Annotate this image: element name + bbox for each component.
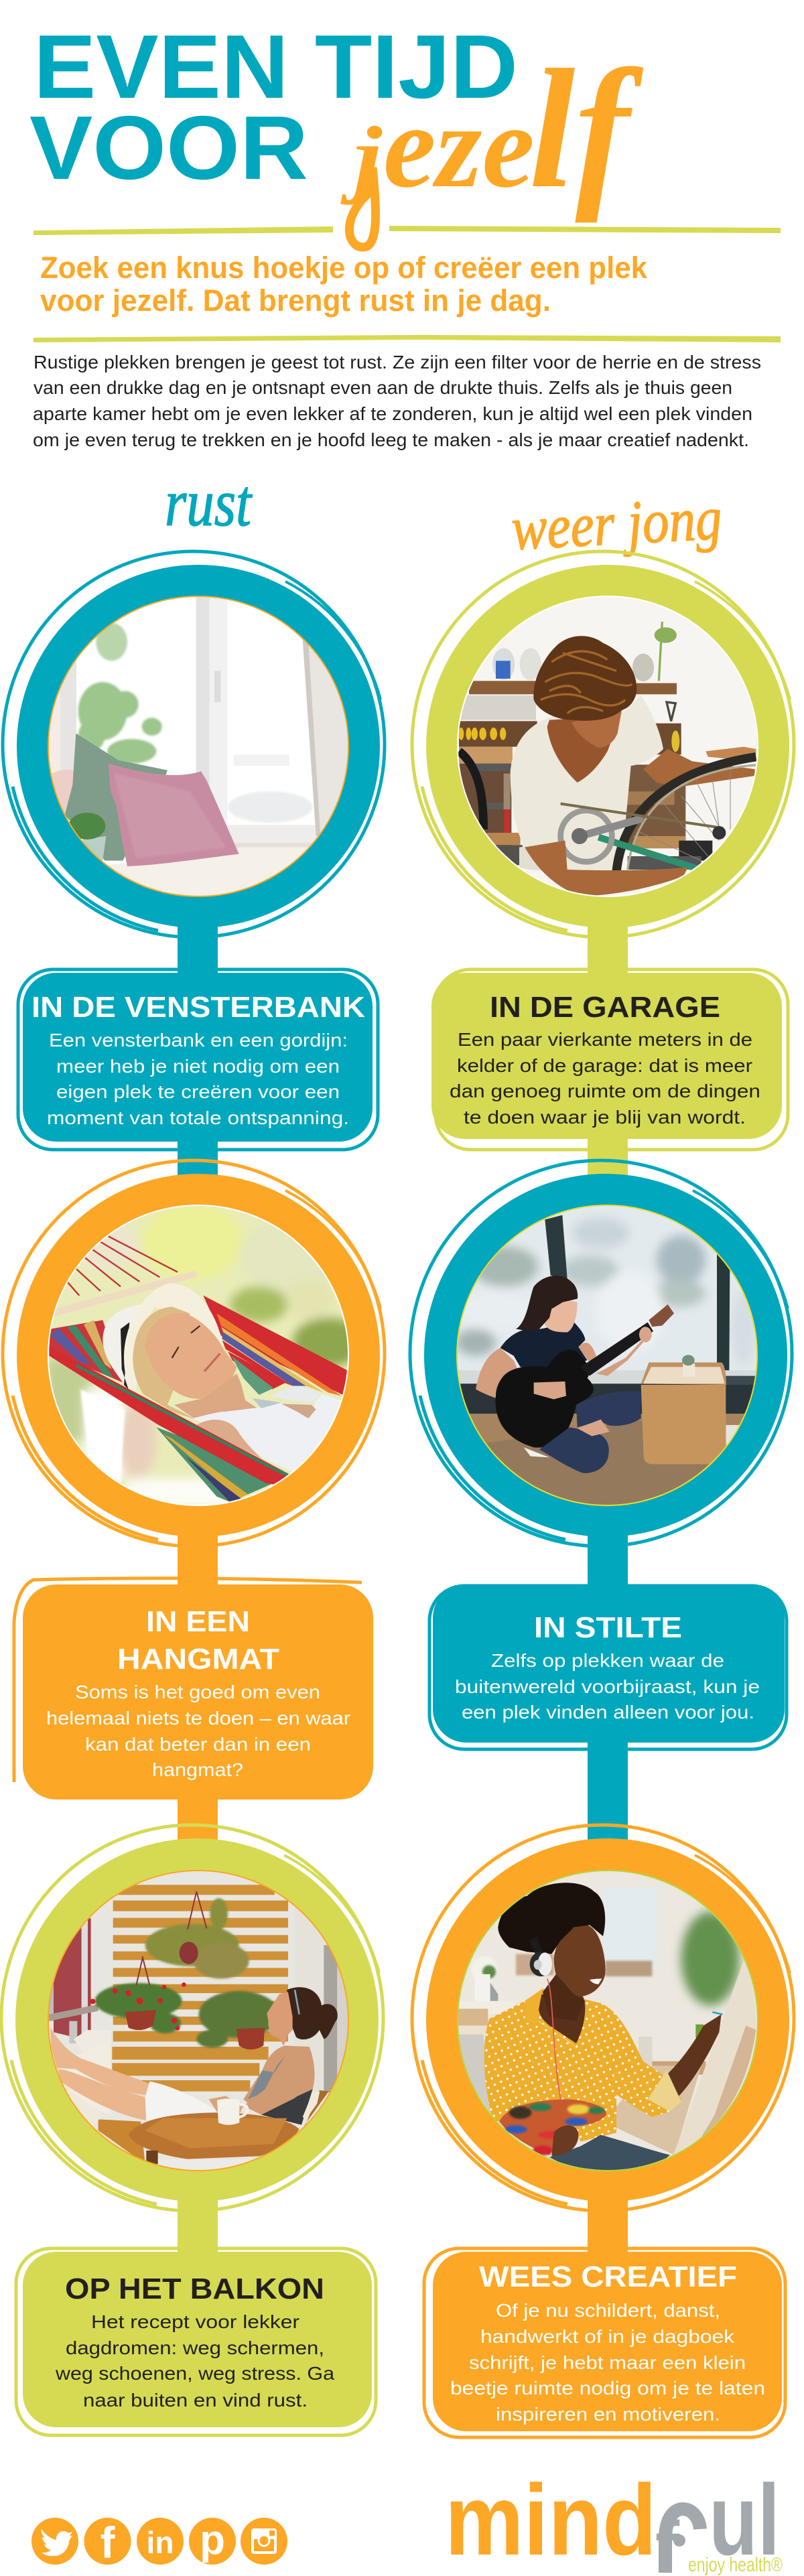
- card body: beetje ruimte nodig om je te laten: [450, 2378, 765, 2398]
- card body: [455, 1650, 760, 1722]
- card body: [47, 1030, 349, 1128]
- card: in de vensterbank: [18, 969, 378, 1150]
- card heading: IN DE GARAGE: [490, 991, 720, 1024]
- card heading: IN DE VENSTERBANK: [31, 991, 365, 1024]
- card body: weg schoenen, weg stress. Ga: [55, 2363, 334, 2384]
- intro text: om je even terug te trekken en je hoofd leeg te maken - als je maar creatief nadenkt.: [33, 429, 749, 450]
- photo: window seat with cushions: [47, 595, 350, 898]
- card body: handwerkt of in je dagboek: [480, 2326, 735, 2347]
- card heading: WEES CREATIEF: [479, 2260, 737, 2293]
- title: even tijd voor: [29, 16, 518, 198]
- circle ring: guitar: [410, 1160, 792, 1546]
- card: in de garage: [431, 969, 788, 1150]
- card body: Zelfs op plekken waar de: [491, 1650, 724, 1671]
- circle ring: creative: [412, 1825, 794, 2211]
- card body: kelder of de garage: dat is meer: [457, 1055, 752, 1076]
- card body: hangmat?: [152, 1759, 243, 1780]
- icon: linkedin: [137, 2518, 184, 2565]
- intro text: van een drukke dag en je ontsnapt even aan de drukte thuis. Zelfs als je thuis geen: [34, 377, 732, 398]
- ring edge: [48, 596, 348, 896]
- logo: mindful: ul: [709, 2463, 780, 2576]
- card body: eigen plek te creëren voor een: [56, 1081, 340, 1102]
- title: script word jezelf: lf: [529, 35, 644, 224]
- card body: [450, 1029, 760, 1128]
- ring edge: [458, 596, 758, 896]
- ring edge: [48, 1205, 348, 1505]
- ring edge: [48, 1871, 348, 2171]
- card body: [46, 1682, 350, 1780]
- title: script word jezelf: [340, 35, 644, 247]
- photo: woman painting with headphones: [456, 1869, 758, 2172]
- intro text: [33, 352, 761, 450]
- icon: instagram: [241, 2518, 287, 2565]
- title: even tijd voor: EVEN TIJD: [34, 16, 518, 117]
- card body: inspireren en motiveren.: [496, 2404, 720, 2425]
- connector stems right column: [588, 925, 628, 2254]
- card body: buitenwereld voorbijraast, kun je: [455, 1676, 760, 1697]
- photo: man fixing bicycle in garage: [456, 595, 758, 898]
- icon: pinterest: p: [200, 2517, 225, 2563]
- card body: meer heb je niet nodig om een: [56, 1056, 340, 1077]
- heading: rust: rust: [165, 466, 253, 540]
- subtitle: voor jezelf. Dat brengt rust in je dag.: [40, 283, 551, 318]
- social icons: [31, 2517, 287, 2567]
- card body: een plek vinden alleen voor jou.: [462, 1702, 754, 1722]
- card body: Soms is het goed om even: [75, 1682, 320, 1702]
- card: in een hangmat: [14, 1578, 373, 1800]
- card: in stilte: [429, 1584, 787, 1749]
- card body: Een paar vierkante meters in de: [458, 1029, 752, 1050]
- card heading: IN EEN: [146, 1605, 250, 1638]
- icon: linkedin: in: [147, 2525, 174, 2560]
- icon: twitter: [31, 2518, 78, 2565]
- subtitle: Zoek een knus hoekje op of creëer een plek: [40, 251, 648, 285]
- icon: facebook: f: [100, 2518, 116, 2567]
- card body: [450, 2300, 765, 2425]
- subtitle: [40, 251, 648, 318]
- heading: weer jong: weer jong: [510, 484, 724, 563]
- photo: woman playing guitar by window: [456, 1204, 758, 1507]
- card body: Of je nu schildert, danst,: [496, 2300, 720, 2321]
- title: script word jezelf: eze: [383, 80, 535, 212]
- photo: woman asleep in hammock: [47, 1204, 364, 1507]
- circle ring: hammock: [3, 1160, 385, 1546]
- logo: mindful: mind: [445, 2463, 657, 2576]
- card body: Een vensterbank en een gordijn:: [49, 1030, 348, 1050]
- title: even tijd voor: VOOR: [29, 97, 308, 198]
- card body: naar buiten en vind rust.: [83, 2390, 308, 2411]
- card body: te doen waar je blij van wordt.: [464, 1107, 746, 1128]
- ring edge: [458, 1871, 758, 2171]
- card heading: IN STILTE: [534, 1611, 682, 1644]
- photo: woman relaxing on balcony: [47, 1869, 350, 2172]
- connector stems left column: [178, 925, 218, 2254]
- card body: helemaal niets te doen – en waar: [46, 1708, 350, 1728]
- title: script word jezelf: j: [340, 109, 383, 206]
- card body: Het recept voor lekker: [91, 2311, 299, 2332]
- circle ring: balcony: [1, 1825, 383, 2211]
- card heading: OP HET BALKON: [65, 2273, 324, 2305]
- icon: facebook: [84, 2518, 131, 2567]
- icon: pinterest: [189, 2517, 236, 2565]
- card body: [55, 2311, 334, 2411]
- card heading: [117, 1605, 279, 1676]
- card body: moment van totale ontspanning.: [47, 1107, 349, 1128]
- card: wees creatief: [424, 2248, 785, 2437]
- card heading: HANGMAT: [117, 1643, 279, 1676]
- intro text: Rustige plekken brengen je geest tot rust. Ze zijn een filter voor de herrie en de stress: [34, 352, 761, 372]
- circle ring: garage: [412, 551, 794, 937]
- card body: kan dat beter dan in een: [85, 1734, 311, 1755]
- card body: dan genoeg ruimte om de dingen: [450, 1081, 760, 1101]
- card body: dagdromen: weg schermen,: [66, 2337, 324, 2358]
- ring edge: [457, 1205, 757, 1505]
- circle ring: window seat: [3, 551, 385, 937]
- card body: schrijft, je hebt maar een klein: [469, 2352, 746, 2373]
- card: op het balkon: [16, 2248, 376, 2435]
- intro text: aparte kamer hebt om je even lekker af te zonderen, kun je altijd wel een plek vinden: [33, 403, 752, 424]
